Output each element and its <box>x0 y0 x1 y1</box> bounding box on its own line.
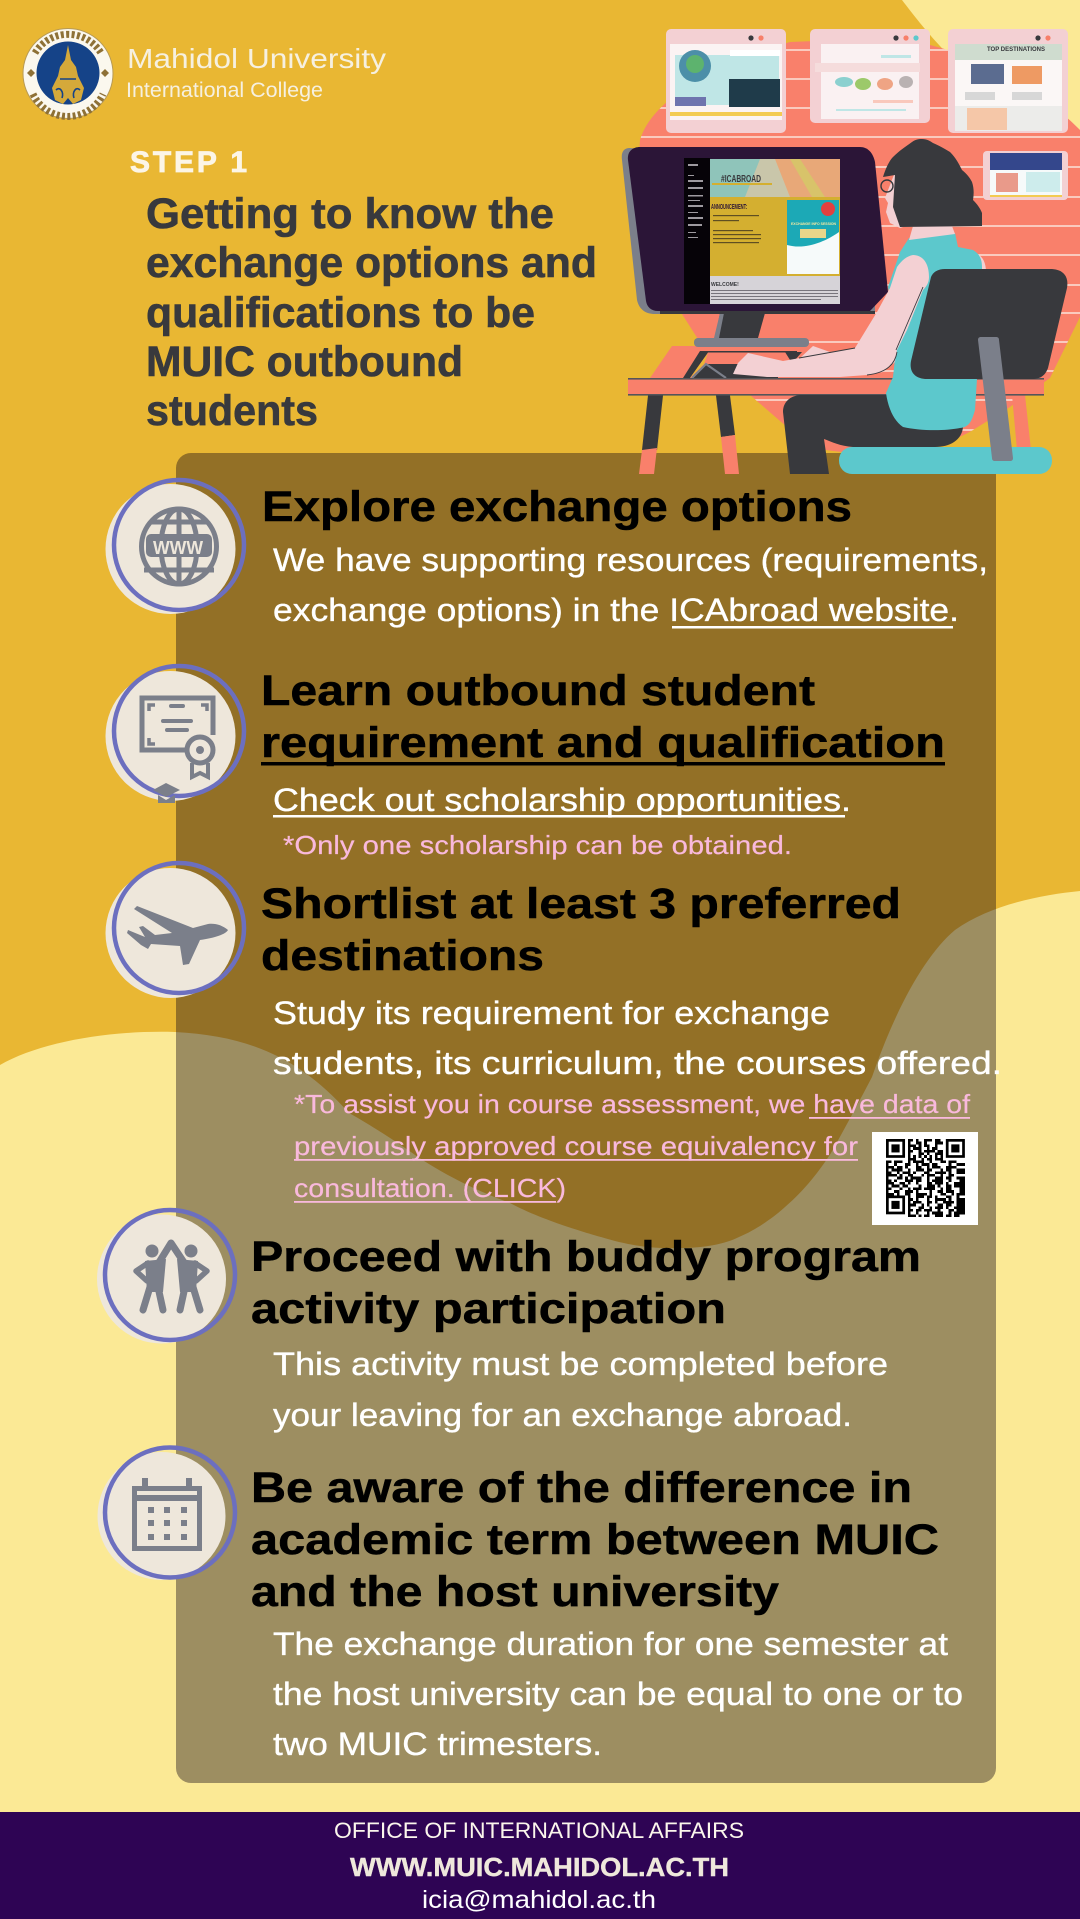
illustration: woman at computer <box>622 29 1068 474</box>
monitor screen <box>684 158 840 304</box>
browser card 3: TOP DESTINATIONS <box>987 47 1045 53</box>
heading: Learn outbound student <box>261 667 815 715</box>
logo <box>23 28 386 118</box>
title <box>146 190 597 435</box>
body text: Study its requirement for exchange <box>273 995 830 1031</box>
shirt <box>979 255 986 269</box>
heading <box>261 667 945 767</box>
icon: airplane <box>106 863 244 998</box>
title: Getting to know the <box>146 190 554 238</box>
neck and face <box>885 172 955 240</box>
salmon blob with stripes <box>600 38 1080 454</box>
browser card 1 <box>666 29 786 133</box>
chair post <box>978 337 1013 461</box>
desk <box>628 346 1044 474</box>
step: shortlist destinations <box>106 863 1002 1225</box>
note: *Only one scholarship can be obtained. <box>283 830 792 860</box>
heading: Be aware of the difference in <box>251 1464 912 1512</box>
chair seat <box>839 447 1052 474</box>
body text: This activity must be completed before <box>273 1346 888 1382</box>
icon: globe <box>106 480 244 614</box>
body text: students, its curriculum, the courses offered. <box>273 1045 1002 1081</box>
logo wordmark <box>126 43 386 102</box>
icon: graduation cap <box>153 783 180 803</box>
body text: the host university can be equal to one or to <box>273 1676 963 1712</box>
body text <box>273 995 1002 1081</box>
arm <box>733 255 929 377</box>
body text: The exchange duration for one semester at <box>273 1626 948 1662</box>
QR code <box>872 1132 978 1225</box>
heading: destinations <box>261 932 544 980</box>
heading: Explore exchange options <box>262 483 852 531</box>
body text <box>273 1626 963 1762</box>
step label: STEP 1 <box>130 146 247 179</box>
chair back <box>911 269 1067 379</box>
heading: Proceed with buddy program <box>251 1233 921 1281</box>
heading <box>261 880 901 980</box>
main content panel <box>176 453 996 1783</box>
step: explore exchange options <box>106 480 988 628</box>
title: exchange options and <box>146 239 597 287</box>
heading: and the host university <box>251 1568 779 1616</box>
body text <box>273 542 988 628</box>
heading: academic term between MUIC <box>251 1516 939 1564</box>
heading <box>251 1233 921 1333</box>
monitor screen: EXCHANGE INFO SESSION <box>791 222 836 226</box>
title: qualifications to be <box>146 289 535 337</box>
body text: two MUIC trimesters. <box>273 1726 602 1762</box>
icon: two people high five <box>97 1210 235 1344</box>
footer email: icia@mahidol.ac.th <box>422 1886 656 1914</box>
step: academic term <box>98 1448 963 1762</box>
body text: We have supporting resources (requirements, <box>273 542 988 578</box>
logo wordmark: Mahidol University <box>127 43 386 74</box>
icon: calendar <box>98 1448 235 1580</box>
monitor <box>622 147 888 347</box>
icon: certificate <box>106 666 244 803</box>
pants <box>783 395 963 474</box>
footer <box>0 1812 1080 1919</box>
browser card 4 <box>983 151 1068 200</box>
title: students <box>146 387 318 435</box>
heading: activity participation <box>251 1285 726 1333</box>
heading <box>251 1464 939 1616</box>
footer website: WWW.MUIC.MAHIDOL.AC.TH <box>350 1852 729 1882</box>
icon: globe: WWW <box>153 538 203 558</box>
body text: your leaving for an exchange abroad. <box>273 1397 852 1433</box>
heading: Shortlist at least 3 preferred <box>261 880 901 928</box>
monitor screen: ANNOUNCEMENT: <box>711 204 747 211</box>
title: MUIC outbound <box>146 338 463 386</box>
glasses <box>881 180 893 192</box>
body link: Check out scholarship opportunities. <box>273 782 851 818</box>
note with link <box>294 1089 971 1203</box>
note with link: consultation. (CLICK) <box>294 1173 566 1203</box>
monitor screen: #ICABROAD <box>721 174 761 185</box>
browser card 3 <box>948 29 1068 133</box>
logo wordmark: International College <box>126 79 323 102</box>
note with link: *To assist you in course assessment, we have data of <box>294 1089 971 1119</box>
body text <box>273 1346 888 1433</box>
step: buddy program <box>97 1210 921 1433</box>
hair <box>883 139 982 227</box>
woman <box>733 139 986 474</box>
browser card 2 <box>810 29 930 123</box>
heading: requirement and qualification <box>261 719 945 767</box>
step: learn requirement and qualification <box>106 666 945 860</box>
body text: exchange options) in the ICAbroad website. <box>273 592 959 628</box>
monitor screen: WELCOME! <box>711 282 739 288</box>
footer office name: OFFICE OF INTERNATIONAL AFFAIRS <box>334 1818 744 1843</box>
note with link: previously approved course equivalency for <box>294 1131 858 1161</box>
